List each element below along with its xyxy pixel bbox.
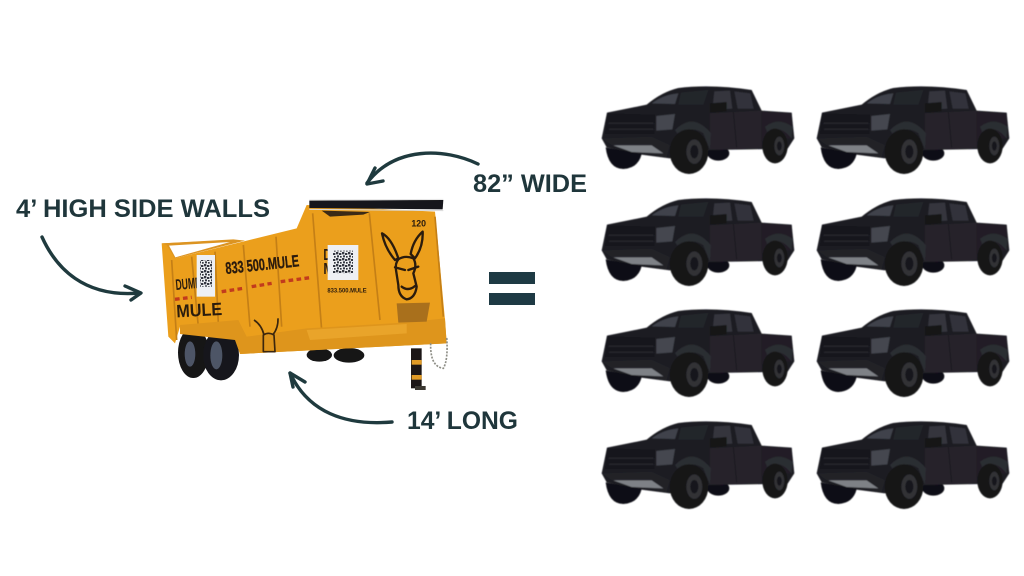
truck row 3 left — [602, 309, 794, 397]
trailer wheels — [178, 327, 239, 380]
truck row 2 left — [602, 198, 794, 286]
truck row 4 right — [817, 421, 1009, 509]
truck row 1 right — [817, 86, 1009, 174]
arrow: wide to trailer top — [367, 153, 478, 184]
trailer ribs — [172, 213, 443, 340]
trailer jack — [411, 348, 426, 390]
trailer body — [162, 205, 447, 354]
trailer frame — [180, 318, 447, 354]
label: 4 foot high side walls: 4’ HIGH SIDE WALLS — [16, 195, 270, 223]
dump trailer — [162, 199, 447, 390]
equals sign — [489, 272, 535, 305]
truck row 2 right — [817, 198, 1009, 286]
dump trailer: MULE — [323, 260, 358, 277]
donkey head large — [382, 232, 423, 299]
arrow: side walls to trailer — [42, 237, 141, 300]
trailer logo text: DUMP — [175, 274, 201, 294]
truck row 1 left — [602, 86, 794, 174]
label: 82 inch wide: 82” WIDE — [473, 170, 587, 198]
trailer phone number: 833 500.MULE — [224, 251, 300, 278]
dump trailer: DUMP — [323, 246, 355, 263]
truck row 3 right — [817, 309, 1009, 397]
trailer stripes — [175, 278, 310, 299]
grid of eight pickup trucks — [602, 86, 1009, 509]
QR sticker right — [328, 245, 358, 280]
dump trailer: 833.500.MULE — [327, 288, 367, 295]
label: 14 foot long: 14’ LONG — [407, 407, 518, 435]
arrow: long to trailer bottom — [290, 373, 392, 423]
trailer number: 120 — [411, 219, 426, 229]
donkey head small — [254, 318, 278, 352]
trailer front wheels behind — [307, 348, 332, 362]
QR sticker left — [197, 255, 215, 297]
dump trailer: MULE — [176, 299, 223, 322]
truck row 4 left — [602, 421, 794, 509]
trailer tarp — [309, 199, 443, 211]
trailer chains — [431, 337, 447, 368]
